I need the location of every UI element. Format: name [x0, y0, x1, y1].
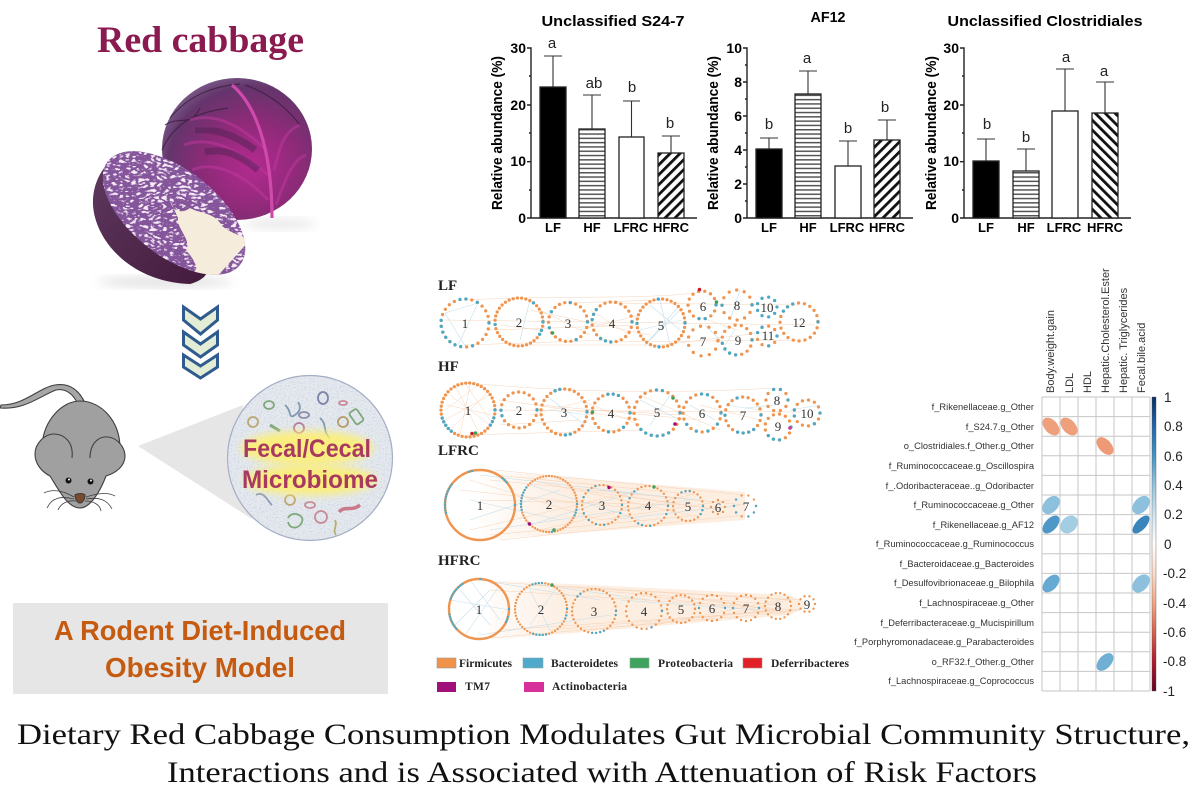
network: LFRC — [438, 443, 756, 540]
module numbers: 8 — [775, 599, 781, 614]
main title: Dietary Red Cabbage Consumption Modulates Gut Microbial Community Structure, — [17, 718, 1190, 751]
module numbers: 11 — [762, 328, 774, 343]
microbes — [248, 392, 364, 535]
bar chart: Unclassified S24-7: b — [628, 79, 636, 96]
module numbers: 3 — [565, 316, 571, 331]
colour scale: 0.8 — [1164, 419, 1183, 434]
bar chart: Unclassified Clostridiales: LF — [978, 220, 994, 235]
legend item: TM7 — [437, 681, 490, 693]
colour scale: 0.6 — [1164, 449, 1183, 464]
colour scale: 0.2 — [1164, 507, 1183, 522]
column labels — [1045, 268, 1148, 393]
module numbers: 1 — [477, 498, 483, 513]
colour scale: 0.4 — [1164, 478, 1183, 493]
module numbers: 1 — [465, 403, 471, 418]
phylum accent nodes — [470, 396, 792, 435]
module numbers: 3 — [591, 604, 597, 619]
bar chart: AF12: 4 — [734, 142, 742, 158]
row labels: f_Lachnospiraceae.g_Other — [919, 598, 1034, 608]
legend item: Proteobacteria: Proteobacteria — [658, 658, 733, 670]
bar chart: AF12: 10 — [726, 40, 742, 56]
colour scale: -0.6 — [1163, 625, 1186, 640]
module numbers: 5 — [654, 405, 660, 420]
colour scale: -1 — [1163, 684, 1175, 699]
correlation ellipses — [1039, 414, 1153, 674]
module numbers: 7 — [740, 408, 747, 423]
module numbers: 4 — [645, 498, 652, 513]
nose — [75, 494, 85, 503]
bar chart: AF12 — [705, 9, 913, 235]
legend item: Deferribacteres: Deferribacteres — [771, 658, 850, 670]
column labels: Hepatic.Cholesterol.Ester — [1100, 268, 1112, 393]
module numbers — [477, 497, 750, 515]
row labels: f_Rikenellaceae.g_Other — [932, 402, 1034, 412]
row labels: o_Clostridiales.f_Other.g_Other — [904, 441, 1034, 451]
phylum accent node — [550, 583, 554, 587]
phylum accent nodes — [551, 288, 718, 335]
row labels: f_Bacteroidaceae.g_Bacteroides — [900, 559, 1034, 569]
bar chart: AF12: b — [844, 120, 852, 137]
module numbers — [465, 393, 814, 434]
network: LF: LF — [438, 278, 457, 294]
module numbers: 6 — [699, 406, 706, 421]
bar chart: Unclassified S24-7: LF — [545, 220, 561, 235]
colour scale — [1152, 390, 1187, 699]
legend item: Bacteroidetes: Bacteroidetes — [551, 658, 619, 670]
module numbers: 4 — [608, 406, 615, 421]
bar chart: Unclassified S24-7: 10 — [510, 153, 526, 169]
module numbers: 4 — [609, 316, 616, 331]
row labels: f_.Odoribacteraceae..g_Odoribacter — [886, 481, 1034, 491]
module numbers: 6 — [709, 601, 716, 616]
bar chart: Unclassified S24-7: 0 — [518, 210, 526, 226]
microbiome disc — [225, 373, 395, 543]
bar chart: Unclassified S24-7: Unclassified S24-7 — [542, 13, 684, 30]
row labels: o_RF32.f_Other.g_Other — [932, 657, 1034, 667]
bar chart: Unclassified Clostridiales: 10 — [943, 153, 959, 169]
row labels: f_Desulfovibrionaceae.g_Bilophila — [894, 578, 1035, 588]
bar chart: Unclassified Clostridiales: HF — [1017, 220, 1035, 235]
column labels: HDL — [1082, 371, 1094, 393]
bar chart: AF12: 2 — [734, 176, 742, 192]
magnifier wedge — [138, 405, 252, 519]
whole cabbage — [162, 78, 312, 220]
row labels — [854, 402, 1035, 686]
module numbers: 5 — [678, 602, 684, 617]
bar chart: Unclassified S24-7: 30 — [510, 40, 526, 56]
bar chart: Unclassified Clostridiales: Unclassified Clostridiales — [948, 13, 1142, 30]
row labels: f_Porphyromonadaceae.g_Parabacteroides — [854, 637, 1034, 647]
bar chart: Unclassified Clostridiales — [923, 13, 1142, 235]
bar chart: AF12: 0 — [734, 210, 742, 226]
bar chart: Unclassified Clostridiales: 30 — [943, 40, 959, 56]
module numbers: 2 — [516, 403, 522, 418]
panel: rodent model label: A Rodent Diet-Induced — [54, 615, 346, 646]
colour scale: 0 — [1164, 537, 1172, 552]
network: HF: HF — [438, 359, 459, 375]
module numbers: 2 — [516, 315, 522, 330]
column labels: Fecal.bile.acid — [1136, 323, 1148, 393]
bar chart: Unclassified Clostridiales: a — [1062, 49, 1071, 66]
bar chart: AF12: a — [803, 50, 812, 67]
bar chart: Unclassified S24-7: 20 — [510, 97, 526, 113]
module numbers: 3 — [599, 498, 605, 513]
bar chart: Unclassified S24-7: ab — [586, 75, 602, 92]
network: HFRC: HFRC — [438, 553, 480, 569]
bar chart: Unclassified S24-7: b — [666, 115, 674, 132]
network: LF — [438, 278, 818, 356]
bar chart: AF12: b — [765, 116, 773, 133]
panel: rodent model label — [13, 603, 388, 694]
label: Fecal/Cecal Microbiome: Fecal/Cecal — [243, 435, 371, 463]
legend item: Actinobacteria: Actinobacteria — [552, 681, 627, 693]
module numbers: 7 — [743, 601, 750, 616]
illustration: mouse — [0, 385, 125, 511]
bar chart: Unclassified S24-7: a — [548, 35, 557, 52]
row labels: f_Ruminococcaceae.g_Oscillospira — [889, 461, 1035, 471]
module numbers: 9 — [735, 333, 741, 348]
module numbers — [476, 597, 810, 619]
main title: Interactions and is Associated with Attenuation of Risk Factors — [167, 756, 1037, 789]
legend item: Firmicutes: Firmicutes — [459, 658, 513, 670]
row labels: f_Deferribacteraceae.g_Mucispirillum — [881, 618, 1034, 628]
colour scale: -0.2 — [1163, 566, 1186, 581]
network: HF — [438, 359, 820, 440]
illustration: red cabbages — [92, 78, 312, 290]
row labels: f_Ruminococcaceae.g_Other — [914, 500, 1034, 510]
module numbers: 2 — [546, 497, 552, 512]
module numbers: 10 — [800, 406, 814, 421]
correlation matrix — [854, 268, 1187, 699]
panel: rodent model label: Obesity Model — [105, 652, 295, 683]
colour scale: -0.8 — [1163, 654, 1186, 669]
bar chart: Unclassified Clostridiales: b — [983, 116, 991, 133]
colour scale: -0.4 — [1163, 596, 1187, 611]
bar chart: Unclassified Clostridiales: a — [1100, 63, 1109, 80]
label: Fecal/Cecal Microbiome — [242, 435, 378, 494]
bar chart: Unclassified S24-7: HFRC — [653, 220, 690, 235]
phylum accent nodes — [528, 485, 656, 532]
module numbers: 2 — [538, 602, 544, 617]
legend: phyla — [437, 658, 850, 693]
row labels: f_Ruminococcaceae.g_Ruminococcus — [876, 539, 1034, 549]
module numbers: 7 — [743, 499, 750, 514]
legend item: TM7: TM7 — [465, 681, 490, 693]
bar chart: AF12: 8 — [734, 74, 742, 90]
bar chart: Unclassified Clostridiales: Relative abundance (%) — [923, 56, 940, 210]
bar chart: Unclassified Clostridiales: b — [1022, 129, 1030, 146]
arrow: triple chevron — [184, 307, 218, 378]
eyes — [66, 478, 94, 484]
bar chart: Unclassified Clostridiales: 0 — [951, 210, 959, 226]
module numbers: 9 — [804, 597, 810, 612]
colour scale: 1 — [1164, 390, 1172, 405]
module numbers: 6 — [700, 299, 707, 314]
module numbers: 12 — [792, 315, 806, 330]
label: Fecal/Cecal Microbiome: Microbiome — [242, 466, 378, 494]
bar chart: Unclassified S24-7: HF — [583, 220, 601, 235]
column labels: Hepatic. Triglycerides — [1118, 287, 1130, 393]
module numbers: 5 — [685, 499, 691, 514]
bar chart: AF12: Relative abundance (%) — [705, 56, 722, 210]
bar chart: AF12: 6 — [734, 108, 742, 124]
module numbers: 5 — [658, 318, 664, 333]
bar chart: AF12: LF — [761, 220, 777, 235]
bar chart: AF12: HFRC — [869, 220, 906, 235]
module numbers: 7 — [700, 334, 707, 349]
bar chart: AF12: AF12 — [810, 9, 846, 26]
heading: Red cabbage: Red cabbage — [97, 20, 304, 61]
bar chart: Unclassified Clostridiales: HFRC — [1087, 220, 1124, 235]
bar chart: Unclassified S24-7: LFRC — [614, 220, 649, 235]
module numbers: 10 — [760, 300, 774, 315]
bar chart: Unclassified S24-7 — [489, 13, 697, 235]
column labels: Body.weight.gain — [1045, 310, 1057, 393]
module numbers: 1 — [476, 602, 482, 617]
whiskers — [44, 491, 115, 511]
bar chart: AF12: b — [881, 99, 889, 116]
module numbers: 3 — [561, 405, 567, 420]
network: LFRC: LFRC — [438, 443, 479, 459]
row labels: f_Rikenellaceae.g_AF12 — [933, 520, 1034, 530]
module numbers: 1 — [462, 316, 468, 331]
bar chart: AF12: LFRC — [830, 220, 865, 235]
module numbers — [462, 298, 806, 349]
module numbers: 8 — [734, 298, 740, 313]
row labels: f_S24.7.g_Other — [966, 422, 1034, 432]
bar chart: Unclassified Clostridiales: 20 — [943, 97, 959, 113]
module numbers: 9 — [775, 419, 781, 434]
main title — [17, 718, 1190, 789]
module numbers: 8 — [774, 393, 780, 408]
cut half cabbage — [92, 151, 246, 284]
bar chart: Unclassified Clostridiales: LFRC — [1047, 220, 1082, 235]
network: HFRC — [438, 553, 815, 640]
module numbers: 4 — [641, 604, 648, 619]
bar chart: Unclassified S24-7: Relative abundance (%) — [489, 56, 506, 210]
row labels: f_Lachnospiraceae.g_Coprococcus — [888, 676, 1034, 686]
column labels: LDL — [1064, 373, 1076, 393]
bar chart: AF12: HF — [799, 220, 817, 235]
module numbers: 6 — [715, 500, 722, 515]
